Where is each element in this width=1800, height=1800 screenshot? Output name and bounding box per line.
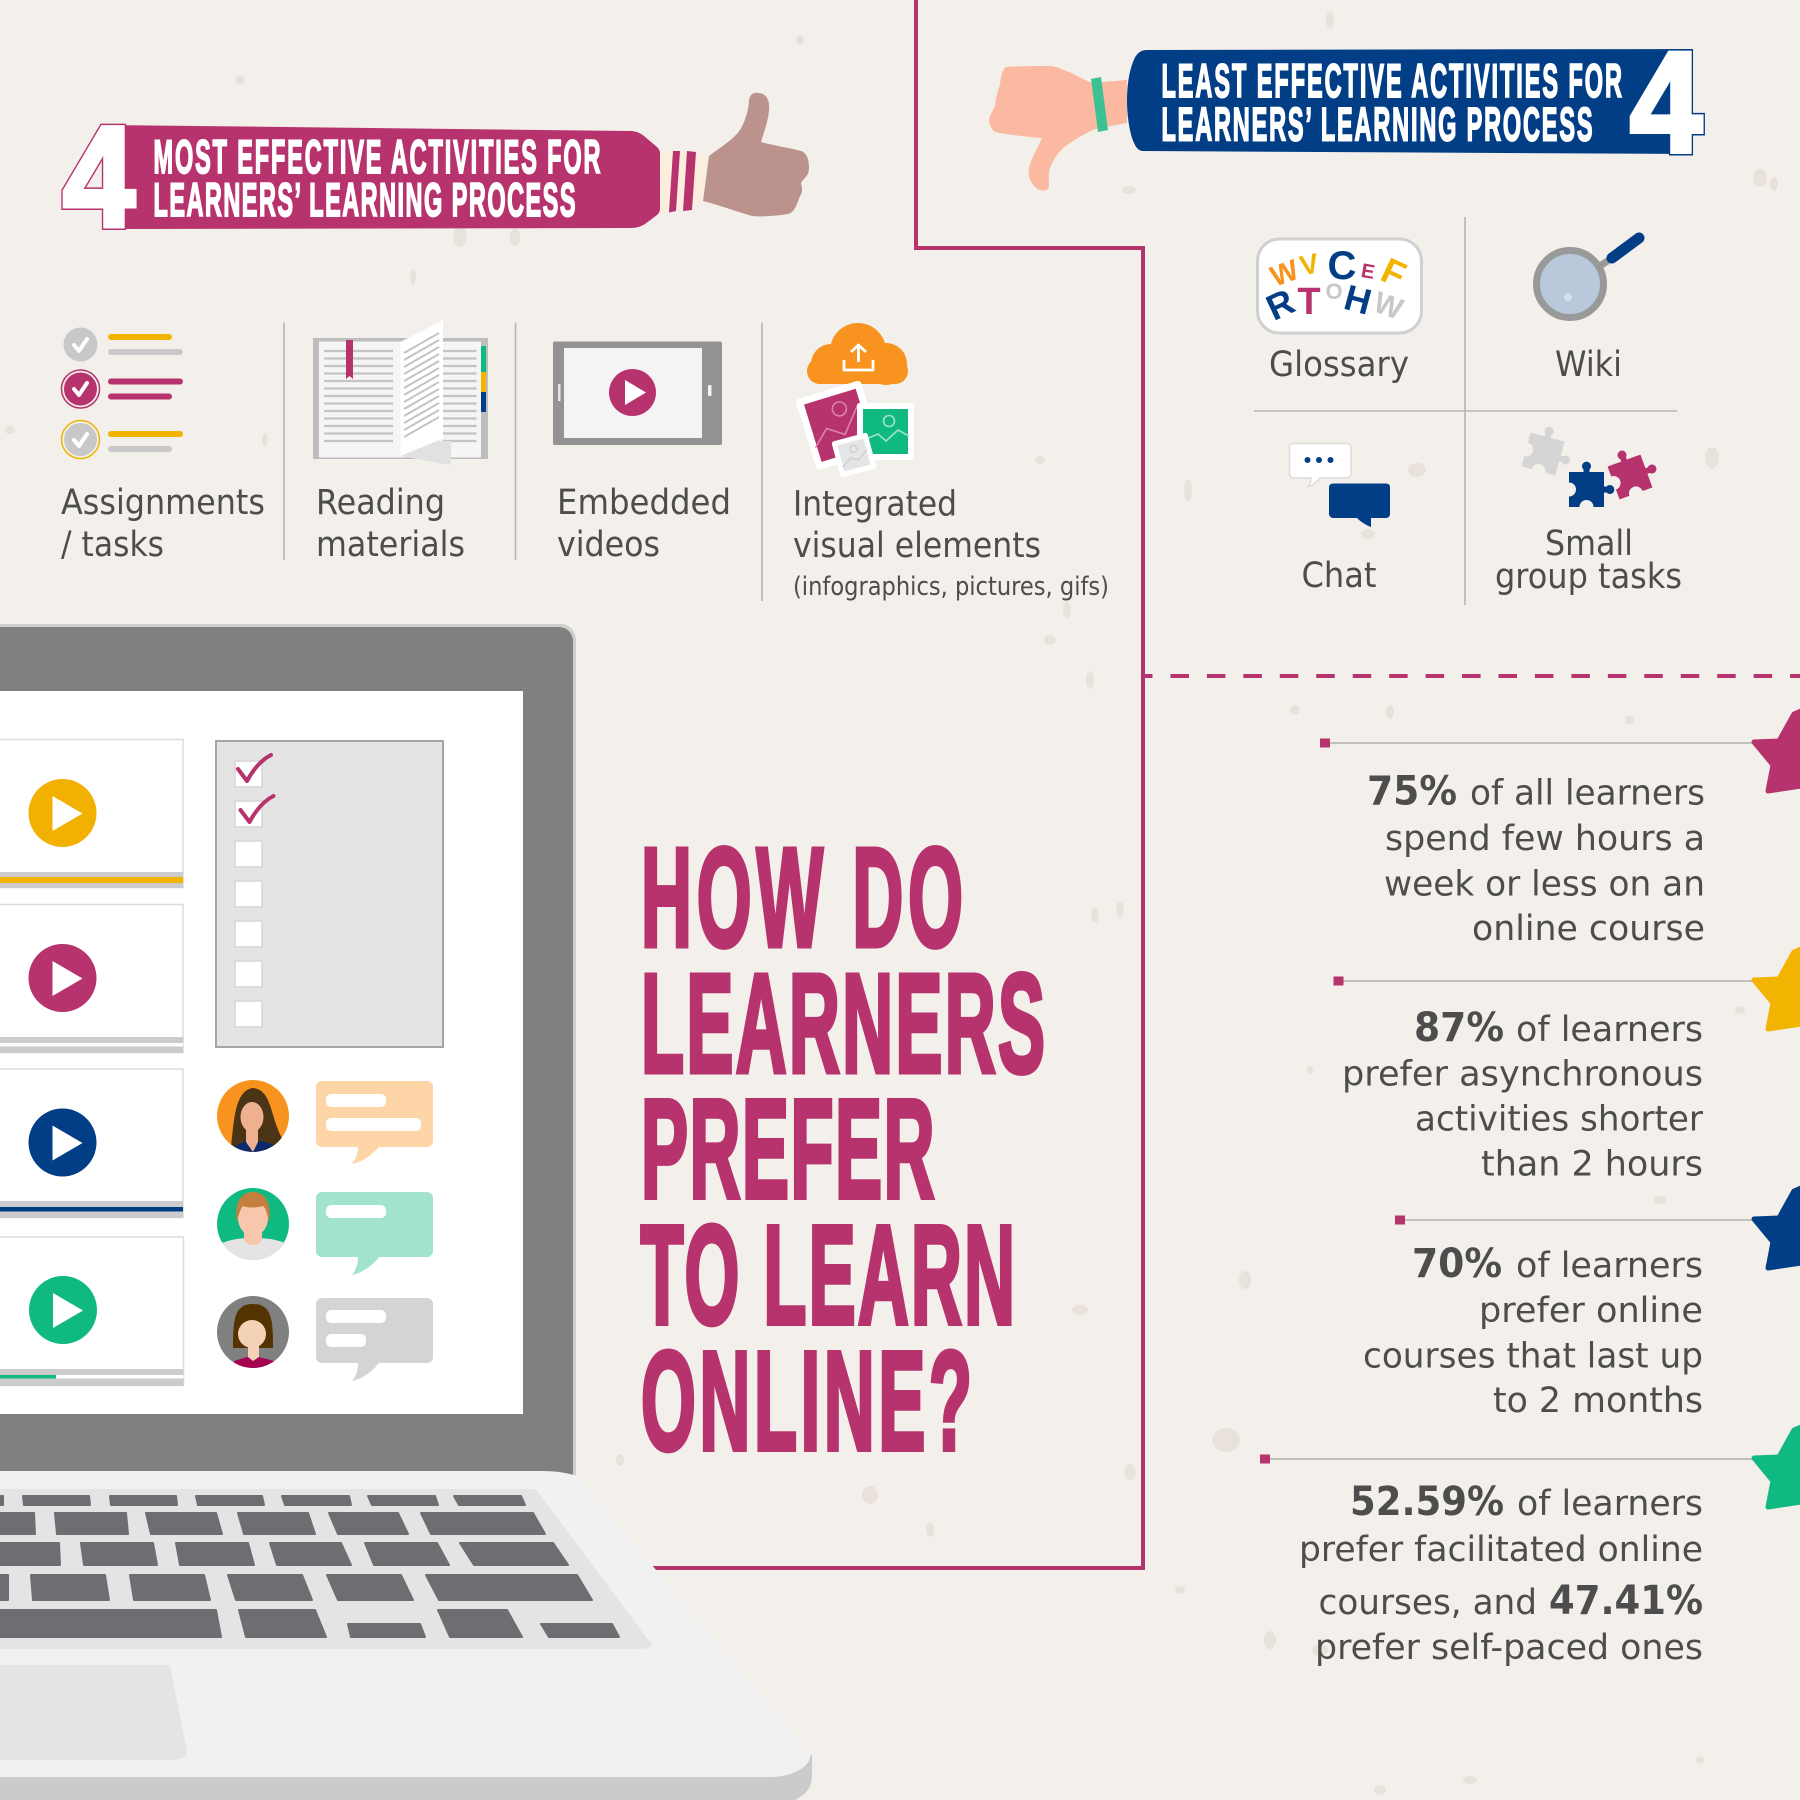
connector line and square (1334, 976, 1752, 986)
text (1367, 768, 1705, 949)
text: of learners (1516, 1246, 1703, 1286)
item: embedded videos (553, 342, 731, 565)
banner heading: LEAST EFFECTIVE ACTIVITIES FOR (1162, 54, 1622, 107)
label (316, 483, 465, 565)
connector line and square (1320, 738, 1752, 748)
icon: puzzle pieces (1522, 423, 1662, 507)
item: chat (1290, 444, 1390, 596)
icon: star (1754, 1185, 1800, 1268)
banner heading: MOST EFFECTIVE ACTIVITIES FOR (154, 130, 601, 183)
text: 47.41% (1549, 1578, 1703, 1624)
item: reading materials (313, 320, 488, 565)
video card 1 (0, 740, 183, 888)
label: / tasks (61, 525, 164, 565)
text: of all learners (1470, 774, 1705, 814)
icon: magnifying glass (1536, 238, 1639, 318)
icon: thumbs down (989, 66, 1127, 190)
trackpad (0, 1665, 187, 1760)
numeral 4: 4 (1630, 24, 1702, 182)
icon: letter card (1258, 239, 1422, 333)
text (1363, 1241, 1703, 1421)
text: week or less on an (1384, 864, 1705, 904)
item: integrated visual elements (793, 323, 1109, 602)
title: HOW DO (641, 818, 963, 976)
avatar and message 3 (217, 1296, 433, 1381)
label: Glossary (1269, 345, 1409, 385)
icon: open book (313, 320, 488, 465)
title: TO LEARN (640, 1196, 1015, 1354)
icon: letter card: W (1369, 286, 1408, 327)
icon: star (1754, 708, 1800, 791)
banner heading: LEARNERS’ LEARNING PROCESS (1162, 97, 1592, 151)
wrist band (1091, 77, 1108, 132)
text: spend few hours a (1385, 819, 1705, 859)
item: small group tasks (1495, 423, 1682, 597)
text: of learners (1516, 1010, 1703, 1050)
text: prefer self-paced ones (1315, 1628, 1703, 1668)
title (640, 818, 1045, 1480)
text (1342, 1005, 1704, 1184)
magenta frame line (640, 0, 1143, 1568)
text: activities shorter (1415, 1100, 1704, 1140)
title: PREFER (641, 1070, 934, 1228)
banner: least effective activities (989, 24, 1702, 190)
label (1495, 524, 1682, 597)
icon: letter card: T (1297, 281, 1321, 323)
banner shape (110, 125, 660, 229)
text: 52.59% (1350, 1479, 1504, 1525)
icon: thumbs up (703, 93, 809, 216)
label: visual elements (793, 526, 1041, 566)
icon: tablet with play button (553, 342, 722, 445)
icon: star (1754, 1424, 1800, 1507)
label: Chat (1302, 556, 1376, 596)
item: assignments / tasks (61, 328, 265, 565)
icon: star (1754, 946, 1800, 1029)
label: group tasks (1495, 557, 1682, 597)
icon: checklist (62, 328, 180, 458)
text: 75% (1367, 768, 1457, 814)
numeral 4: 4 (1630, 24, 1702, 182)
banner heading (154, 130, 601, 226)
label: Small (1545, 524, 1633, 564)
wrist band (660, 151, 707, 214)
video card 4 (0, 1237, 184, 1386)
text: online course (1472, 909, 1705, 949)
label: Integrated (793, 484, 957, 524)
text: prefer online (1479, 1291, 1703, 1331)
icon: letter card: E (1359, 260, 1376, 284)
text: 70% (1412, 1241, 1502, 1287)
stat: 75% (1320, 708, 1800, 949)
label: materials (316, 525, 465, 565)
screen content (0, 691, 523, 1414)
label (61, 483, 265, 565)
numeral 4: 4 (63, 98, 135, 257)
banner heading: LEARNERS’ LEARNING PROCESS (154, 173, 576, 226)
stat: 70% (1363, 1185, 1800, 1421)
label (557, 483, 731, 565)
icon: letter card: W (1266, 254, 1304, 294)
label: Wiki (1555, 345, 1622, 385)
title: LEARNERS (641, 944, 1045, 1102)
label: Embedded (557, 483, 731, 523)
stat: 52.59% and 47.41% (1260, 1424, 1800, 1668)
label: videos (557, 525, 660, 565)
label (793, 484, 1109, 602)
connector line and square (1260, 1454, 1752, 1464)
icon: speech bubbles (1290, 444, 1390, 527)
banner heading (1162, 54, 1622, 151)
icon: letter card: V (1297, 247, 1322, 282)
stat: 87% (1334, 946, 1800, 1184)
text: 87% (1414, 1005, 1504, 1051)
text: courses that last up (1363, 1336, 1703, 1376)
text (1299, 1479, 1703, 1668)
label: Assignments (61, 483, 265, 523)
icon: letter card: C (1328, 244, 1356, 288)
laptop screen bezel (0, 624, 576, 1480)
text: courses, and (1318, 1583, 1537, 1623)
laptop (0, 624, 812, 1800)
text: of learners (1517, 1484, 1703, 1524)
video card 3 (0, 1069, 183, 1218)
text: prefer asynchronous (1342, 1054, 1703, 1094)
avatar and message 1 (217, 1080, 433, 1164)
icon: letter card: O (1325, 279, 1343, 304)
icon: letter card: F (1375, 249, 1412, 296)
checklist panel (216, 741, 443, 1047)
item: glossary (1258, 239, 1422, 385)
label: (infographics, pictures, gifs) (793, 572, 1109, 602)
label: Reading (316, 483, 445, 523)
text: to 2 months (1493, 1381, 1703, 1421)
banner shape (1127, 49, 1692, 154)
video card 2 (0, 904, 183, 1053)
connector line and square (1395, 1216, 1752, 1224)
icon: cloud and images (800, 323, 911, 475)
icon: letter card: R (1260, 280, 1301, 329)
text: prefer facilitated online (1299, 1530, 1703, 1570)
keyboard (0, 1489, 652, 1649)
banner: most effective activities (63, 93, 809, 257)
text: than 2 hours (1481, 1144, 1703, 1184)
icon: letter card: H (1340, 276, 1376, 323)
laptop base (0, 1471, 812, 1800)
avatar and message 2 (217, 1188, 433, 1275)
item: wiki (1536, 238, 1639, 385)
title: ONLINE? (641, 1322, 972, 1480)
numeral 4: 4 (63, 98, 135, 257)
